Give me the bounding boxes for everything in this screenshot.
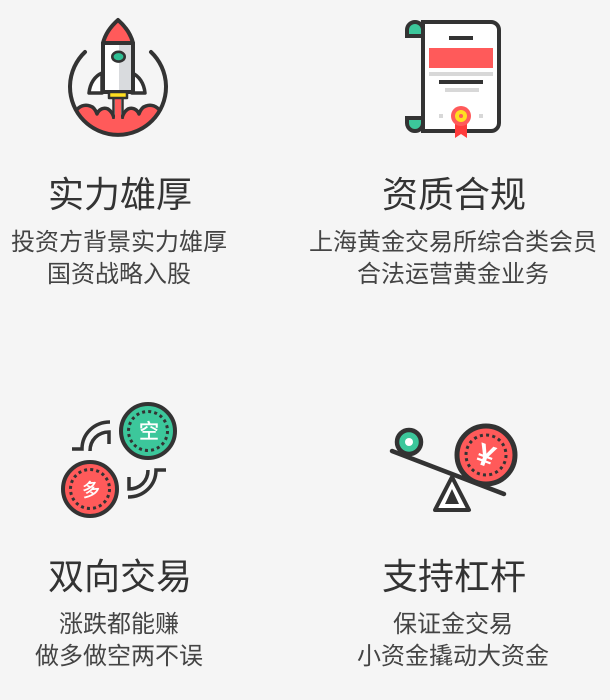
title: strength: 实力雄厚 <box>48 174 192 215</box>
text: qualification description: 合法运营黄金业务 <box>357 261 549 288</box>
text: leverage description: 保证金交易 <box>393 611 513 638</box>
text: strength description <box>11 229 227 288</box>
title: leverage: 支持杠杆 <box>382 556 526 597</box>
text: strength description: 投资方背景实力雄厚 <box>11 229 227 256</box>
text: two-way trading description <box>35 611 203 670</box>
icon: two-way trading coins: 多 <box>81 479 101 501</box>
text: two-way trading description: 涨跌都能赚 <box>59 611 179 638</box>
text: leverage description <box>357 611 549 670</box>
icon: rocket <box>68 18 168 137</box>
icon: seesaw lever: ¥ <box>472 436 501 475</box>
title: two-way trading: 双向交易 <box>48 556 192 597</box>
icon: two-way trading coins <box>61 402 177 518</box>
text: qualification description: 上海黄金交易所综合类会员 <box>309 229 597 256</box>
icon: two-way trading coins: 空 <box>139 420 159 443</box>
title: qualification: 资质合规 <box>382 174 526 215</box>
icon: certificate <box>405 20 501 138</box>
icon: seesaw lever <box>390 424 518 512</box>
text: strength description: 国资战略入股 <box>47 261 191 288</box>
text: two-way trading description: 做多做空两不误 <box>35 643 203 670</box>
text: leverage description: 小资金撬动大资金 <box>357 643 549 670</box>
text: qualification description <box>309 229 597 288</box>
